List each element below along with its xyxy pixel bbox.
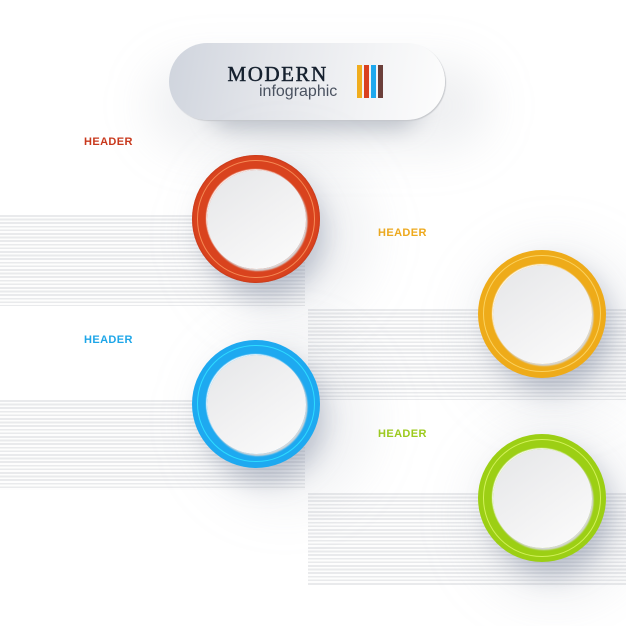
stripe panel: green section	[308, 493, 626, 585]
shadow: red circle	[206, 172, 324, 296]
circle: blue	[192, 340, 320, 468]
heading: green header: HEADER	[378, 428, 427, 440]
circle: green	[478, 434, 606, 562]
shadow: green circle	[492, 451, 610, 575]
heading: yellow header: HEADER	[378, 227, 427, 239]
heading: red header: HEADER	[84, 136, 133, 148]
soft halo: blue circle	[200, 335, 370, 505]
pill body	[169, 43, 445, 120]
pill shadow	[209, 83, 419, 129]
circle: yellow	[478, 250, 606, 378]
stripe panel: yellow section	[308, 309, 626, 400]
heading: blue header: HEADER	[84, 334, 133, 346]
soft halo: green circle	[470, 430, 626, 600]
icon: four colour bars	[357, 65, 383, 98]
stripe panel: blue section	[0, 400, 305, 490]
circle: red	[192, 155, 320, 283]
title text: MODERN: MODERN	[228, 62, 328, 86]
title pill	[155, 43, 483, 152]
subtitle text: infographic: infographic	[259, 82, 337, 100]
stripe panel: red section	[0, 215, 305, 306]
soft halo: red circle	[200, 150, 370, 320]
soft halo: yellow circle	[470, 245, 626, 415]
shadow: blue circle	[206, 357, 324, 481]
shadow: yellow circle	[492, 266, 610, 390]
pill wide shadow	[149, 63, 489, 148]
